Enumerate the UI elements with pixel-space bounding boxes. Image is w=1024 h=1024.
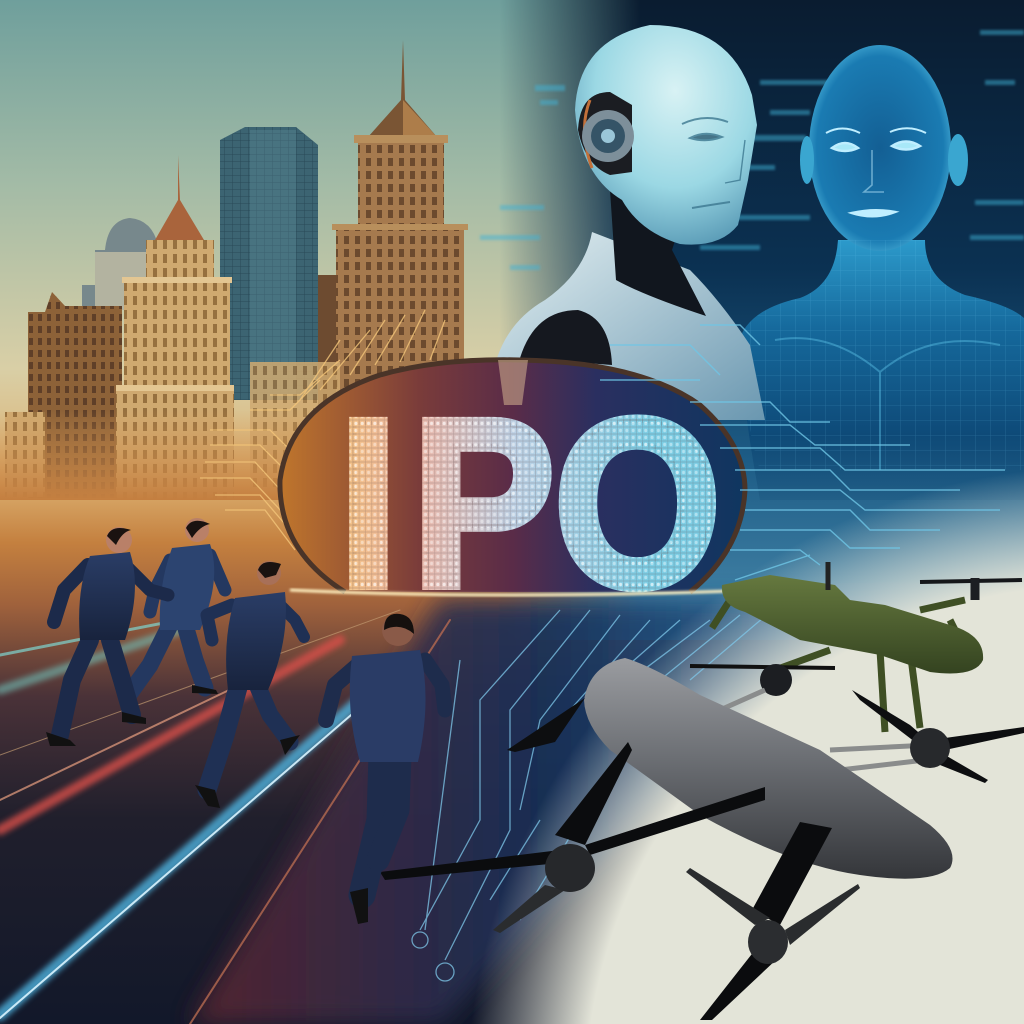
letter dot texture: IPO xyxy=(338,369,721,638)
runners in suits xyxy=(46,518,445,924)
robot: ear disc xyxy=(578,92,634,175)
grey drone xyxy=(380,658,1024,1020)
digital data dashes xyxy=(480,30,1024,270)
robot: face xyxy=(682,118,745,208)
human: wireframe grid xyxy=(738,240,1024,470)
runner 4 xyxy=(326,614,445,924)
background: navy digital panel xyxy=(480,0,1024,640)
title letters IPO xyxy=(338,369,721,638)
building: small rear block xyxy=(318,275,338,405)
arch: rim xyxy=(280,360,745,592)
city skyline xyxy=(0,40,520,500)
robot: neck xyxy=(610,190,706,316)
IPO arch portal xyxy=(280,360,745,592)
green drone: rotors xyxy=(690,562,1022,696)
skyline fade xyxy=(0,410,520,500)
human: body xyxy=(738,240,1024,500)
human: head xyxy=(800,45,968,251)
building: glass tower xyxy=(220,127,318,400)
arch: oval backing xyxy=(280,360,745,592)
letter fill: IPO xyxy=(338,369,721,638)
human: face xyxy=(826,128,926,216)
robot: head xyxy=(575,25,757,245)
grey drone: right rotor xyxy=(852,690,1024,783)
grey drone: rear struts xyxy=(720,690,930,770)
building: grey dome tower xyxy=(82,218,158,310)
spark line under letters xyxy=(290,590,760,595)
grey drone: front-left rotor xyxy=(380,742,765,933)
grey drone: fuselage xyxy=(584,658,952,879)
background: pale lower right xyxy=(380,440,1024,1024)
runner 2 xyxy=(130,518,225,694)
blue wireframe human xyxy=(738,45,1024,500)
wire bundle: gold left xyxy=(200,310,445,550)
arch: inner clip tab xyxy=(498,360,528,405)
runner 1 xyxy=(46,527,168,746)
grey drone: rear-left rotor xyxy=(507,698,585,752)
light streaks on road xyxy=(0,598,770,1024)
building: cream tower with dome xyxy=(116,155,234,500)
runner 3 xyxy=(195,561,304,808)
green drone: arms and legs xyxy=(712,600,970,732)
circuit traces: blue right xyxy=(600,325,1005,580)
green military drone xyxy=(690,562,1022,732)
robot: shoulder joint xyxy=(520,310,612,365)
building: mid brick annex xyxy=(250,362,340,492)
floor circuit traces xyxy=(412,610,770,981)
human: chest contour xyxy=(775,338,1000,470)
green drone: body xyxy=(722,575,983,674)
grey drone: front-right rotor xyxy=(686,822,860,1020)
humanoid robot xyxy=(497,25,765,420)
robot: torso xyxy=(497,232,765,420)
building: tall brown tower xyxy=(332,40,468,415)
building: left brick block xyxy=(5,292,122,498)
floor: right circuit zone xyxy=(190,600,1000,1024)
